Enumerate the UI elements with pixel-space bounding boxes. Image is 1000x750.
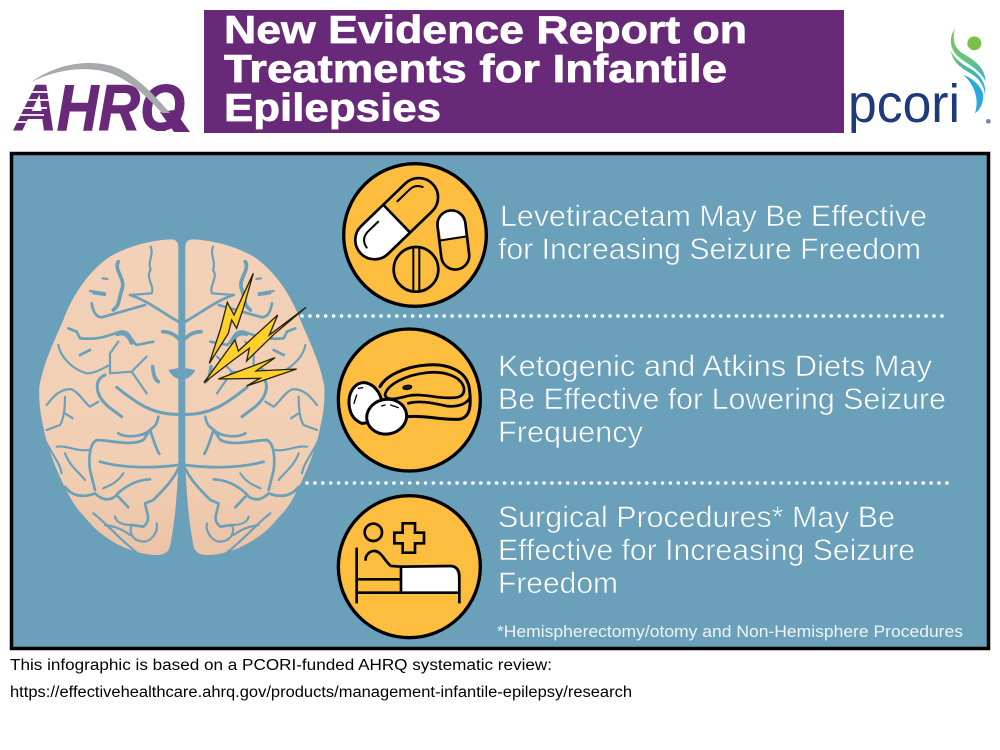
title banner: New Evidence Report on [224, 9, 747, 52]
logo: PCORI: pcori [848, 74, 960, 134]
title banner: Epilepsies [224, 87, 441, 130]
main panel [12, 154, 988, 648]
title banner [204, 9, 844, 133]
statement: surgery: Freedom [498, 567, 618, 600]
statement: diets: Be Effective for Lowering Seizure [498, 383, 946, 416]
source note [10, 657, 632, 701]
statement: levetiracetam: for Increasing Seizure Freedom [498, 233, 921, 266]
footnote: *Hemispherectomy/otomy and Non-Hemisphere Procedures [497, 623, 963, 641]
statement: levetiracetam: Levetiracetam May Be Effective [500, 200, 927, 233]
icon: pills [344, 164, 486, 306]
statement: levetiracetam [498, 200, 927, 266]
statement: diets: Ketogenic and Atkins Diets May [498, 350, 932, 383]
logo: AHRQ: AHRQ [13, 71, 185, 144]
logo: PCORI [848, 28, 991, 134]
statement: surgery [498, 501, 915, 600]
logo: AHRQ [13, 63, 190, 132]
right hemisphere [185, 239, 324, 555]
source note: https://effectivehealthcare.ahrq.gov/products/management-infantile-epilepsy/research [10, 684, 632, 701]
statement: surgery: Effective for Increasing Seizure [498, 534, 915, 567]
source note: This infographic is based on a PCORI-funded AHRQ systematic review: [10, 657, 552, 674]
dotted divider [302, 314, 948, 318]
statement: diets: Frequency [498, 416, 643, 449]
statement: diets [498, 350, 946, 449]
icon: hospital bed [338, 496, 480, 638]
title banner: Treatments for Infantile [224, 48, 727, 91]
icon: food [338, 329, 480, 471]
left hemisphere [39, 239, 178, 555]
statement: surgery: Surgical Procedures* May Be [498, 501, 895, 534]
brain illustration [39, 239, 324, 555]
dotted divider [307, 481, 948, 485]
lightning bolts [204, 273, 306, 386]
